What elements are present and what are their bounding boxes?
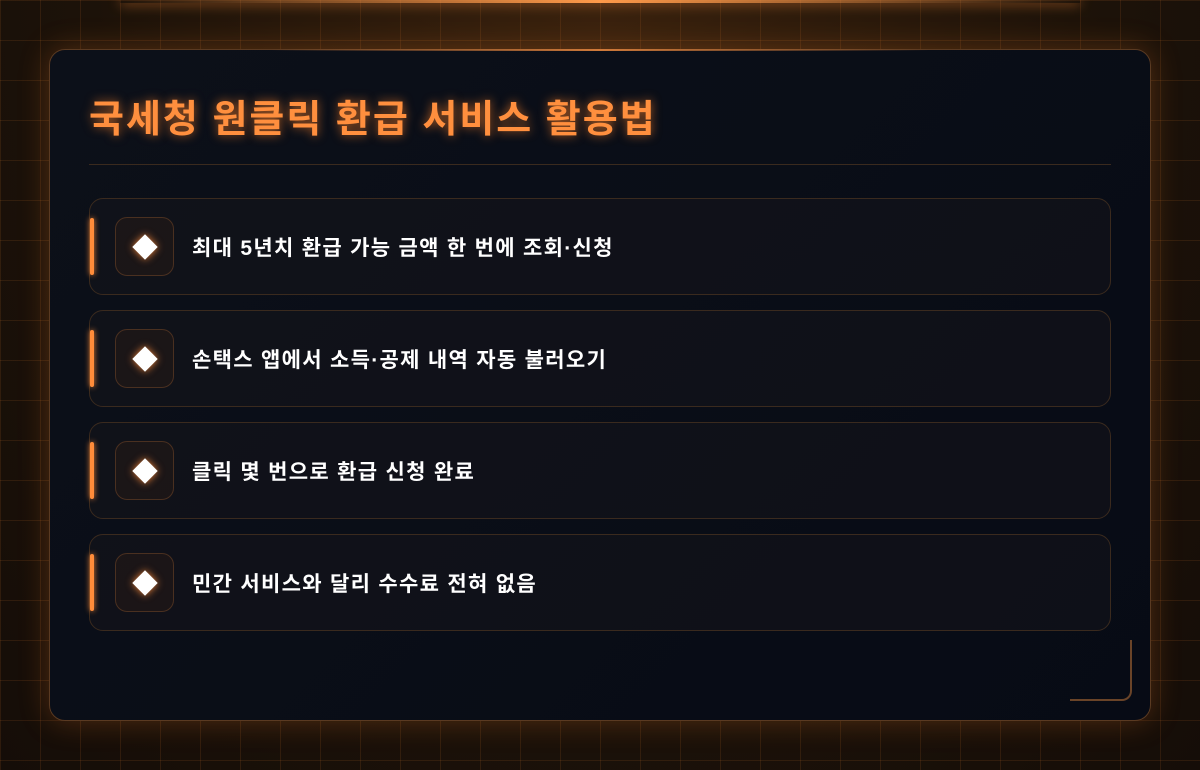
corner bracket	[1070, 640, 1132, 701]
text 2: 손택스 앱에서 소득·공제 내역 자동 불러오기	[192, 349, 607, 372]
icon: diamond	[115, 329, 174, 388]
icon: diamond	[115, 217, 174, 276]
title: 국세청 원클릭 환급 서비스 활용법	[89, 99, 657, 141]
item 2	[89, 310, 1111, 407]
icon: diamond	[115, 441, 174, 500]
text 3: 클릭 몇 번으로 환급 신청 완료	[192, 461, 475, 484]
text 4: 민간 서비스와 달리 수수료 전혀 없음	[192, 573, 537, 596]
item 1	[89, 198, 1111, 295]
icon: diamond	[115, 553, 174, 612]
item 3	[89, 422, 1111, 519]
text 1: 최대 5년치 환급 가능 금액 한 번에 조회·신청	[192, 237, 614, 260]
item 4	[89, 534, 1111, 631]
